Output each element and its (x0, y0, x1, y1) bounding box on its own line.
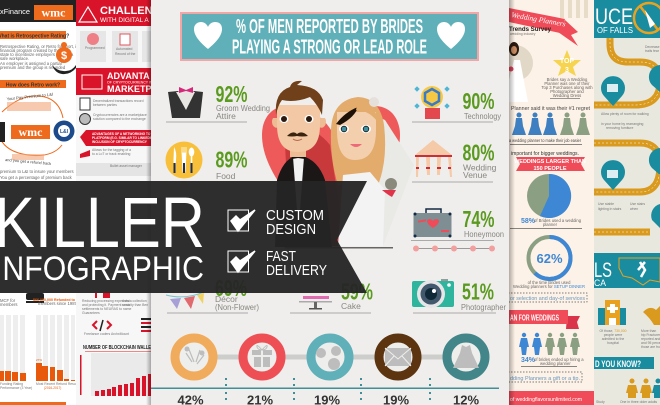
checkbox: custom design: CUSTOM (266, 207, 324, 224)
text block: refund total: members (0, 302, 17, 307)
text block: refund total: $66,000,000 Refunded to (33, 298, 76, 302)
ribbon: weddings larger than 150 people: 150 PEOPLE (533, 166, 567, 172)
section header: falls in America with map (594, 253, 660, 288)
text block: hospital stats: admitted to the (602, 337, 624, 341)
cards: challenges: Record of the (115, 52, 135, 56)
text: 34 percent ended up hiring: 34% (521, 357, 536, 364)
stat: photographer (413, 278, 506, 314)
heading: trends survey: wedding industry (510, 32, 536, 36)
panel: retrospective rating sheet (0, 0, 82, 405)
badge: top 3 star: TOP (560, 58, 574, 65)
red heart backdrop (262, 106, 400, 246)
list: advantages: Decentralized transactions record (93, 99, 144, 103)
panel: reduce risk of falls sheet (594, 0, 660, 405)
decorative stripes and ribbon: wedding planners (509, 0, 588, 46)
text: 62 percent hired (513, 280, 585, 289)
section header: falls in America with map: CA (594, 278, 606, 288)
title banner (181, 13, 478, 60)
text block: lower notes: security than Ben (122, 303, 148, 307)
bride headpiece (369, 97, 379, 107)
red arrow callout (80, 130, 154, 146)
text blocks: road tips: lighting in stairs (598, 207, 622, 211)
icon: suitcase (414, 209, 452, 238)
timeline line (151, 388, 499, 389)
text block: invoice note: to a LoT or track enabling (92, 152, 131, 156)
dotted box: vendor selection (505, 293, 587, 302)
text: 34 percent ended up hiring: of brides ended up hiring a (534, 357, 584, 362)
icon pins along road (601, 65, 660, 228)
text block: top 3 purchase: Top 3 Purchases along with (541, 85, 593, 90)
cards: challenges (80, 31, 151, 62)
stat: food: 89% (216, 146, 248, 172)
pictogram: older adults (626, 378, 660, 398)
text blocks: road tips: Use stairs (630, 202, 645, 206)
diagram: retro cycle: Your Pay Premium to L&I (6, 92, 53, 101)
text: important for bigger weddings: important for bigger weddings. (511, 151, 579, 157)
headline: killer: KILLER (0, 184, 205, 263)
text: make their life easier (509, 138, 582, 145)
bride dress (338, 172, 385, 246)
header: challenges with digital assets: CHALLEN (100, 5, 153, 17)
checkbox: fast delivery: FAST (266, 248, 296, 265)
text block: invoice note: Allows for the tagging of a (92, 148, 131, 152)
text block: lower notes (82, 293, 148, 315)
text block: hospital stats: Of those, 730,000 (600, 329, 627, 333)
ribbon: weddings larger than 150 people (514, 157, 586, 172)
header: reduce risk of falls (594, 0, 660, 38)
bow tie (292, 155, 305, 159)
bar chart: blockchain wallets (80, 353, 151, 396)
header: challenges with digital assets: WITH DIGITAL A (100, 17, 149, 24)
text: 34 percent ended up hiring: wedding planner (540, 361, 571, 366)
shadows (146, 0, 151, 405)
list: advantages: between parties (93, 103, 117, 107)
stat: cake: 59% (341, 278, 373, 304)
stat: decor non-flower (167, 275, 259, 314)
text block: top 3 purchase: Wedding Dress (553, 93, 581, 98)
sheet header: wmc (42, 6, 66, 20)
text block: premium note (0, 169, 74, 180)
text block: premium note: You get a percentage of premium back (0, 175, 73, 180)
dotted separators (225, 378, 431, 400)
stat: technology: Technology (464, 111, 502, 121)
text block: did you know facts (596, 400, 657, 404)
footer bar (0, 402, 66, 405)
text block: definition: state to incentivize employers to have a (0, 52, 74, 57)
sheet header: xFinance (0, 7, 30, 16)
section header: advantages of cryptocurrency marketplace: ADVANTA (107, 71, 150, 81)
badge: top 3 star: 3 (565, 67, 569, 74)
stat: food (216, 146, 248, 181)
red arrow callout: INCLUSION OF CRYPTOCURRENCY (92, 140, 148, 144)
heading: trends survey (509, 27, 552, 36)
heading bar: how does retro work: How does Retro work? (6, 82, 60, 88)
text block: definition: An employer is assigned a partial (0, 61, 62, 66)
heading: number of blockchain wallets: NUMBER OF BLOCKCHAIN WALLE (83, 345, 151, 351)
icon: plate and cutlery (166, 142, 202, 178)
text: 58 percent used a planner: planner (543, 222, 558, 227)
stat: wedding venue: 80% (462, 140, 494, 166)
text block: top 3 purchase (541, 77, 593, 99)
icon: code brackets: Freelance coders ArchxMount (84, 332, 129, 336)
title banner: % OF MEN REPORTED BY BRIDES (236, 16, 423, 38)
icon: database stack (26, 293, 44, 303)
dotted box: vendor selection: or selection and day-of services (510, 296, 586, 302)
text block: did you know facts: One in three older adults (620, 400, 657, 404)
section header: falls in America with map: LS (594, 259, 612, 282)
stat: groom wedding attire: Attire (216, 111, 236, 121)
list: advantages: Cryptocurrencies are a marketplace (93, 113, 147, 117)
text block: hospital stats: hospital (607, 341, 619, 345)
diagram: retro cycle: and you get a refund back (5, 157, 51, 166)
footer: website: of weddingflavorsunlimited.com (510, 397, 582, 403)
stat: photographer: Photographer (461, 302, 506, 312)
text blocks: road tips: removing furniture (606, 126, 633, 130)
donut chart: 62 percent: 62% (536, 251, 563, 266)
divider line under couple (285, 247, 393, 248)
stat: decor non-flower: Décor (215, 294, 238, 304)
diagram: retro cycle: L&I (60, 129, 69, 135)
stat: photographer: 51% (462, 278, 494, 304)
text block: did you know facts: Study (596, 400, 605, 404)
ribbon: plan for weddings (509, 310, 580, 329)
stat: wedding venue: Wedding (463, 162, 497, 172)
stat: honeymoon: Honeymoon (464, 229, 504, 239)
badge: top 3 star (553, 50, 581, 76)
icon: camera (412, 279, 454, 308)
text block: lower notes: Reducing processing expenses (82, 299, 129, 303)
groom shirt (293, 157, 304, 210)
panel: wedding planners sheet (497, 0, 594, 405)
sheet header (0, 0, 76, 22)
bar chart: hours and funding (0, 315, 32, 390)
text blocks: road tips: Decrease (645, 45, 660, 49)
heading: trends survey: Trends Survey (509, 27, 552, 33)
heading: did you know: D YOU KNOW? (595, 359, 641, 369)
section header: advantages of cryptocurrency marketplace (76, 68, 164, 95)
headline: infographic: INFOGRAPHIC (0, 250, 204, 288)
pictogram: 34 percent of brides (519, 333, 580, 355)
icon: cake stand (299, 296, 332, 310)
cards: challenges: Automated (116, 47, 133, 51)
circle: gift 21 percent (243, 338, 281, 376)
groom face (277, 105, 320, 152)
diagram: retro cycle (0, 92, 74, 166)
text block: lower notes: and protecting it. Payment costs (82, 303, 131, 307)
text block: refund total (0, 298, 78, 307)
groom hair (276, 81, 323, 115)
header: challenges with digital assets (76, 0, 153, 26)
groom eyes (281, 116, 312, 122)
icon: hand holding dollar bag (52, 42, 76, 74)
bride eyes (341, 126, 369, 132)
text block: hip fractures (641, 329, 660, 349)
illustration: bride and groom with heart (262, 81, 414, 247)
header: reduce risk of falls: UCE (595, 4, 633, 29)
text: number one regret: Planner said it was their #1 regret (511, 106, 591, 112)
red arrow callout: PLATFORM (E.G. SIMILAR TO LINKEDIN (92, 136, 154, 140)
bride fringe (336, 107, 358, 125)
bar chart: refund results: (2016-2017) (44, 386, 61, 390)
heart shadow (285, 129, 345, 246)
stat: cake: Cake (341, 301, 361, 311)
bouquet (382, 178, 397, 197)
icon: pelvis bone (643, 306, 660, 325)
bar chart: refund results: Most Recent Refund Results (36, 382, 79, 386)
section header: advantages of cryptocurrency marketplace: MARKETPLA (107, 84, 164, 94)
text block: invoice note (76, 148, 151, 176)
stat: wedding venue: Venue (463, 170, 487, 180)
text: 62 percent hired: of the time Brides used (528, 280, 571, 285)
header: reduce risk of falls: OF FALLS (597, 26, 633, 35)
text block: lower notes: settlements to NEURAS to name (82, 307, 131, 311)
bride face (337, 112, 376, 160)
stat: cake (290, 278, 373, 314)
text block: hospital stats (600, 329, 627, 345)
checkbox: fast delivery (228, 248, 327, 279)
stat: decor non-flower: 69% (215, 275, 247, 301)
decorative stripes and ribbon: wedding planners: Wedding Planners (511, 10, 566, 29)
stat: honeymoon (411, 206, 504, 241)
heading: number of blockchain wallets (83, 345, 151, 352)
circle: fireworks 42 percent (175, 338, 213, 376)
icon: technology bulb (415, 86, 449, 119)
dotted box: gift or tip (505, 372, 582, 382)
text: make their life easier: a wedding planner to make their job easier (509, 138, 581, 143)
stat: technology: 90% (462, 88, 494, 114)
diagram: retro cycle: wmc (18, 125, 43, 139)
groom moustache (287, 132, 308, 136)
groom neck and ears (272, 118, 326, 157)
text block: definition: Retrospective Rating, or Retro for short, is a (0, 44, 82, 49)
text block: definition: safe workplace. (0, 56, 29, 61)
circle: envelope 19 percent (379, 338, 417, 376)
stat: groom wedding attire (166, 81, 270, 122)
icon: code brackets (84, 320, 129, 336)
text block: lower notes: Guarantees (82, 311, 100, 315)
title banner: PLAYING A STRONG OR LEAD ROLE (232, 36, 427, 58)
text block: top 3 purchase: Photographer and (550, 89, 584, 94)
icon: left heart (194, 22, 222, 49)
icon: stacked lines (141, 318, 151, 332)
winding road (594, 38, 660, 232)
text block: lower notes: A data collection (122, 299, 147, 303)
bar chart: hours and funding: Funding Rating (0, 382, 23, 386)
text block: definition: premium and the group is refunded (0, 65, 66, 70)
circle: flowers 19 percent (311, 338, 349, 376)
list: advantages (80, 98, 147, 124)
groom suit (275, 156, 332, 247)
checkbox: custom design (228, 207, 324, 238)
text block: premium note: premium to L&I to insure your members (0, 169, 74, 174)
text block: hip fractures: More than (641, 329, 656, 333)
illustration: bride in circle (497, 42, 533, 102)
bride hair (331, 97, 385, 185)
panel: cryptocurrency marketplace sheet (76, 0, 164, 405)
text: 58 percent used a planner: 58% (521, 218, 536, 225)
dotted box: gift or tip: dding Planners a gift or a tip. (510, 376, 580, 382)
bar chart: refund results: 27% (36, 358, 42, 362)
heading bar: how does retro work (0, 80, 66, 88)
connector bar between circles (194, 354, 466, 360)
text block: refund total: members since 1987 (38, 301, 78, 306)
percentages row (177, 392, 479, 405)
icon: right heart (437, 22, 465, 49)
stat: groom wedding attire: 92% (216, 81, 248, 107)
text block: definition: financial program created by the (0, 48, 60, 53)
checkbox: custom design: DESIGN (266, 221, 316, 238)
text: 58 percent used a planner (510, 218, 582, 229)
stat: food: Food (216, 171, 236, 181)
checkbox: fast delivery: DELIVERY (266, 262, 327, 279)
bride veil (338, 115, 414, 246)
footer: website (509, 391, 594, 405)
circle: dress 12 percent (447, 338, 485, 376)
ribbon: weddings larger than 150 people: WEDDINGS LARGER THAN (514, 159, 586, 165)
text block: refund total: MCF for (0, 298, 16, 303)
dotted pink timeline (413, 246, 495, 252)
text blocks: road tips (598, 45, 660, 211)
bar chart: hours and funding: Performance (3 Year) (0, 386, 32, 390)
list: advantages: solution compared to the exchange (93, 117, 146, 121)
stat: groom wedding attire: Groom Wedding (216, 103, 270, 113)
text blocks: road tips: Use stable (598, 202, 614, 206)
donut chart: 62 percent (528, 237, 570, 279)
panel: wedding poster (146, 0, 515, 405)
text: 34 percent ended up hiring (521, 357, 584, 367)
stat: wedding venue (412, 140, 497, 182)
text blocks: road tips: when (630, 207, 638, 211)
icon: hospital (598, 300, 626, 325)
pie chart: 58 percent (527, 174, 571, 218)
bride smile (350, 144, 362, 147)
stat: decor non-flower: (Non-Flower) (215, 302, 259, 312)
text: 58 percent used a planner: of Brides used a wedding (534, 218, 582, 223)
bride eye whites (339, 125, 371, 133)
groom eye whites (280, 115, 314, 123)
icon: tuxedo (168, 87, 203, 118)
promo banner (0, 181, 367, 293)
groom smile (293, 139, 302, 140)
cards: challenges: Programmed (85, 46, 105, 50)
section header: advantages of cryptocurrency marketplace: OF CRYPTOCURRENCY IN (107, 80, 153, 84)
text: 62 percent hired: Wedding planners for SETUP DINNER (513, 284, 585, 289)
text blocks: road tips: in your home by rearranging (601, 122, 644, 126)
icon: no falling sign (634, 3, 660, 33)
bar chart: refund results (36, 315, 79, 390)
text block: invoice note: Bullet asset manager (110, 164, 143, 168)
icon: hand holding dollar bag: $ (61, 50, 67, 62)
red arrow callout: ADVANTAGES OF A NETWORKING TO (92, 132, 151, 136)
text blocks: road tips: Allow plenty of room for walking (601, 112, 649, 116)
pictogram: brides regret (512, 112, 590, 135)
text block: hospital stats: people were (604, 333, 622, 337)
icon: bunting (166, 292, 204, 309)
text block: hip fractures: reported and (641, 337, 660, 341)
stat: technology (412, 88, 502, 122)
ribbon: plan for weddings: AN FOR WEDDINGS (510, 314, 559, 322)
text block: definition (0, 44, 82, 70)
icon: wedding venue tent (415, 140, 452, 177)
stat: honeymoon: 74% (462, 206, 494, 232)
text block: top 3 purchase: Planner was one of their (544, 81, 590, 86)
text blocks: road tips: trails fear (645, 49, 660, 53)
text block: top 3 purchase: Brides say a Wedding (547, 77, 588, 82)
